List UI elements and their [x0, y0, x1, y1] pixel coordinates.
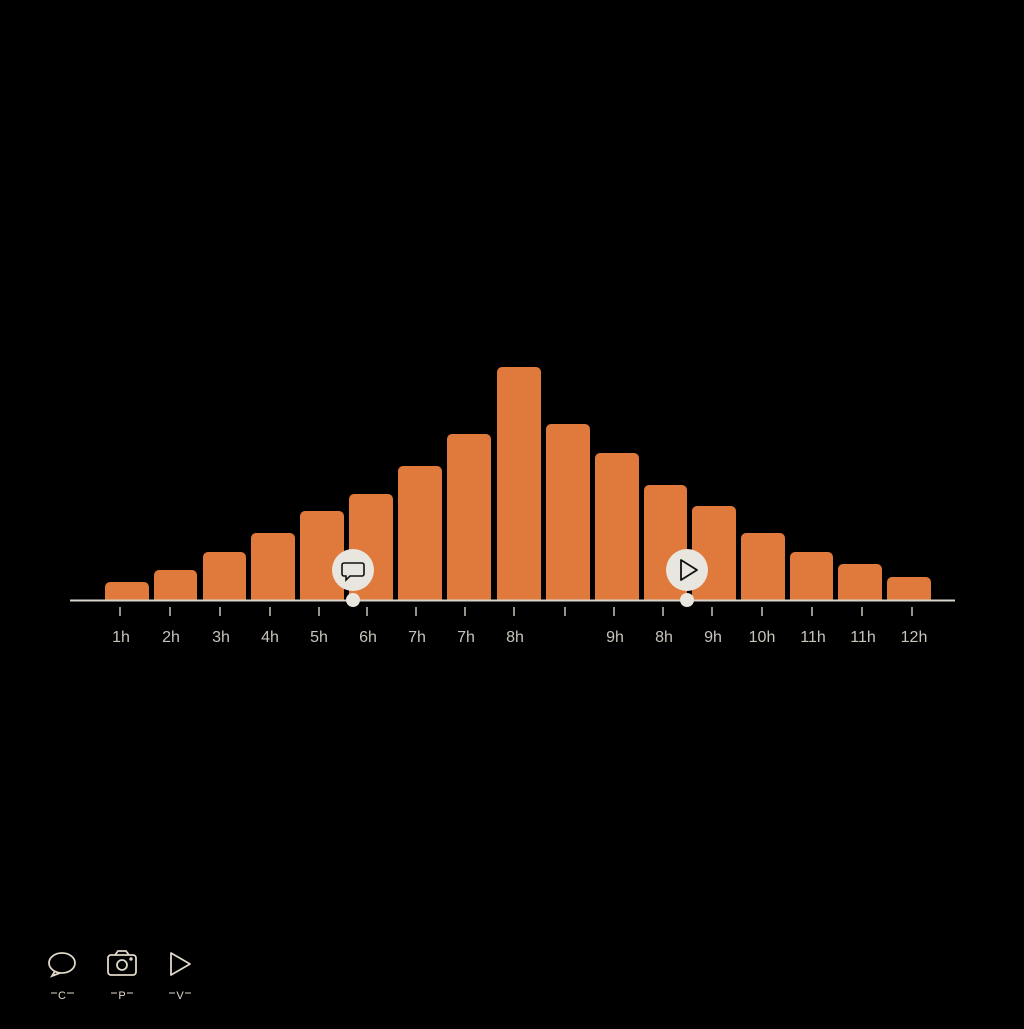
axis labels: 8h — [655, 629, 673, 646]
legend — [49, 951, 190, 976]
legend labels: P — [118, 990, 126, 1002]
icon: camera — [108, 951, 136, 975]
axis labels: 11h — [800, 629, 826, 646]
axis labels — [112, 629, 927, 646]
axis labels: 11h — [850, 629, 876, 646]
axis labels: 2h — [162, 629, 180, 646]
bar chart — [105, 367, 931, 606]
axis labels: 10h — [749, 629, 775, 646]
marker: play — [666, 549, 708, 607]
axis labels: 9h — [606, 629, 624, 646]
icon: play — [171, 953, 190, 975]
axis labels: 9h — [704, 629, 722, 646]
icon: comment — [49, 953, 75, 976]
marker: comment — [332, 549, 374, 607]
axis labels: 7h — [457, 629, 475, 646]
x axis — [70, 600, 955, 616]
axis labels: 3h — [212, 629, 230, 646]
axis labels: 6h — [359, 629, 377, 646]
legend labels — [58, 990, 184, 1002]
axis labels: 8h — [506, 629, 524, 646]
axis labels: 12h — [901, 629, 927, 646]
axis labels: 5h — [310, 629, 328, 646]
axis labels: 1h — [112, 629, 130, 646]
legend labels: V — [176, 990, 184, 1002]
axis labels: 4h — [261, 629, 279, 646]
legend labels: C — [58, 990, 66, 1002]
axis labels: 7h — [408, 629, 426, 646]
